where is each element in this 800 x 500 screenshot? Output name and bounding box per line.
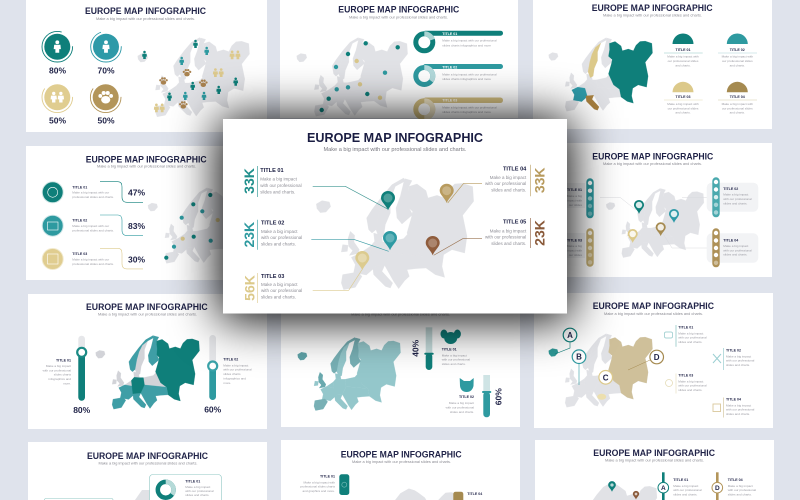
- marker spot: [597, 394, 606, 400]
- item 04: with our professional: [723, 248, 752, 252]
- subtitle: Make a big impact with our professional slides and charts.: [349, 15, 448, 19]
- item A: with our professional: [673, 488, 702, 492]
- item 02: 23K: [241, 222, 257, 248]
- bar 60%: 60%: [204, 404, 222, 414]
- item 04: Make a big impact: [723, 244, 749, 248]
- item 04: TITLE 04: [730, 95, 745, 99]
- item A: A: [661, 485, 666, 492]
- marker C: [599, 370, 612, 384]
- marker C: C: [603, 373, 609, 382]
- row 3: professional slides and charts.: [72, 262, 114, 266]
- item 02: with our professional: [261, 235, 302, 240]
- item 03: Make a big impact: [261, 282, 298, 287]
- heading: EUROPE MAP INFOGRAPHIC: [307, 130, 484, 145]
- item 03: TITLE 03: [678, 374, 693, 378]
- subtitle: Make a big impact with our professional slides and charts.: [603, 14, 702, 18]
- coloured map: [549, 38, 652, 111]
- map fragment: [395, 488, 459, 500]
- item 01: Make a big impact with: [667, 54, 699, 58]
- row 2: [416, 64, 503, 84]
- item 04: TITLE 04: [726, 398, 741, 402]
- item 02: with our professional: [723, 197, 752, 201]
- item 03: Make a big: [567, 244, 582, 248]
- item 04: [718, 82, 757, 115]
- item 01: slides and charts.: [678, 340, 703, 344]
- item 02: Make a big impact: [261, 229, 298, 234]
- text 02: infographics and: [223, 376, 246, 380]
- item 04: [707, 228, 758, 267]
- row 3: 30%: [128, 254, 145, 264]
- stat: 70%: [91, 31, 121, 76]
- row 1: Make a big impact with our: [72, 190, 109, 194]
- row 1: TITLE 01: [72, 185, 87, 189]
- bar 60%: [204, 335, 222, 414]
- item 03: impact with: [567, 248, 582, 252]
- pin 05: [426, 236, 440, 255]
- row 2: 83%: [128, 221, 145, 231]
- drop shadow of centre card: [219, 118, 571, 320]
- item 01: [664, 34, 703, 68]
- item 02: [713, 348, 755, 370]
- item 04: [485, 165, 547, 196]
- row 3: TITLE 03: [442, 99, 457, 103]
- item 01: professional slides charts: [300, 485, 335, 489]
- item 04: slides and charts.: [726, 412, 750, 416]
- item A: [658, 472, 702, 500]
- item 01: [664, 325, 707, 347]
- row 2: TITLE 02: [442, 65, 457, 69]
- item 04: with our professional: [485, 181, 526, 186]
- stat: 80%: [42, 31, 73, 76]
- item 03: our professional slides: [668, 106, 699, 110]
- item 01: and graphics and more.: [302, 489, 335, 493]
- item 04: and charts.: [730, 111, 745, 115]
- item 01: our slides: [569, 203, 582, 207]
- bar 80%: 80%: [73, 405, 91, 415]
- item A: slides and charts.: [673, 492, 698, 496]
- item 03: [664, 82, 703, 115]
- item 01: Make a big: [567, 194, 582, 198]
- subtitle: Make a big impact with our professional slides and charts.: [604, 312, 703, 316]
- item 01: TITLE 01: [260, 168, 284, 174]
- text 02: more.: [223, 381, 231, 385]
- row 3: [416, 98, 503, 118]
- item 05: Make a big impact: [490, 228, 527, 233]
- dot map: [297, 38, 408, 116]
- text 02: [446, 395, 474, 414]
- row 2: professional slides and charts.: [72, 228, 114, 232]
- panel: main centre card: [223, 119, 567, 314]
- subtitle: Make a big impact with our professional slides and charts.: [98, 313, 197, 317]
- heading: EUROPE MAP INFOGRAPHIC: [592, 151, 714, 161]
- item 01: TITLE 01: [676, 48, 690, 52]
- pin 04: [440, 184, 454, 203]
- item 03: slides and charts.: [678, 388, 703, 392]
- item 01: with our professional: [260, 183, 302, 188]
- text 02: Make a big impact: [449, 401, 474, 405]
- subtitle: Make a big impact with our professional slides and charts.: [352, 460, 451, 464]
- text 01: with our professional: [442, 358, 470, 362]
- row 1: professional slides and charts.: [72, 195, 114, 199]
- item A: TITLE 01: [673, 478, 688, 482]
- tube 40%: 40%: [411, 339, 421, 357]
- row 2: slides charts infographics and more: [442, 77, 491, 81]
- text 01: more.: [63, 382, 71, 386]
- icon: cat head: [460, 378, 474, 392]
- item 01: [567, 178, 594, 218]
- panel: highlighted countries: [533, 0, 772, 129]
- item 01: our professional slides: [668, 59, 699, 63]
- panel: round icons with percentages: [26, 146, 267, 280]
- item D: D: [715, 485, 720, 492]
- stat: 50% pair: [42, 82, 73, 126]
- item 01: and charts.: [675, 64, 691, 68]
- marker B: [572, 350, 586, 385]
- item 04: slides and charts.: [491, 188, 526, 192]
- row 2: Make a big impact with our professional: [442, 72, 497, 76]
- row 1: TITLE 01: [442, 32, 457, 36]
- item 01: with our professional: [678, 336, 707, 340]
- subtitle: Make a big impact with our professional slides and charts.: [96, 17, 195, 21]
- panel: bottom left donut boxes: [28, 442, 267, 500]
- item 02: TITLE 02: [726, 349, 741, 353]
- item 03: our slides: [569, 253, 582, 257]
- marker D: [628, 350, 664, 370]
- item 04: our professional slides: [722, 106, 753, 110]
- heading: EUROPE MAP INFOGRAPHIC: [592, 3, 713, 13]
- item 01: TITLE 01: [320, 475, 335, 479]
- text 02: TITLE 02: [223, 358, 238, 362]
- heading: EUROPE MAP INFOGRAPHIC: [86, 154, 207, 164]
- heading: EUROPE MAP INFOGRAPHIC: [341, 450, 462, 460]
- item 02: Make a big impact: [723, 192, 749, 196]
- item 01: 33K: [241, 168, 257, 194]
- item D: slides and charts.: [728, 492, 752, 496]
- text 01: [43, 358, 71, 386]
- heading: EUROPE MAP INFOGRAPHIC: [593, 301, 714, 311]
- dot map: [148, 188, 255, 263]
- map: [298, 337, 401, 410]
- subtitle: Make a big impact with our professional slides and charts.: [603, 162, 702, 166]
- item 02: our professional slides: [722, 59, 753, 63]
- item 02: TITLE 02: [723, 187, 738, 191]
- item 02: Make a big impact with: [722, 54, 753, 58]
- item 01: Make a big impact: [260, 176, 298, 182]
- heading: EUROPE MAP INFOGRAPHIC: [338, 5, 460, 15]
- item 05: 23K: [531, 220, 547, 246]
- item 02: TITLE 02: [730, 48, 745, 52]
- text 02: Make a big impact: [223, 363, 249, 367]
- item 02: with our professional: [726, 359, 755, 363]
- item 02: TITLE 02: [261, 221, 284, 227]
- map fragment: [135, 490, 150, 500]
- item 01: [300, 474, 349, 495]
- subtitle: Make a big impact with our professional slides and charts.: [98, 462, 198, 466]
- text 02: slides and charts.: [450, 410, 474, 414]
- item 03: with our professional: [678, 384, 707, 388]
- pin 02: [383, 231, 397, 250]
- coloured map: [96, 335, 200, 409]
- item 04: slides and charts.: [723, 253, 748, 257]
- item 04: Make a big impact: [726, 403, 751, 407]
- item 03: [241, 273, 302, 303]
- item 02: and charts.: [730, 64, 745, 68]
- box 01: slides and charts.: [185, 493, 210, 497]
- item 03: 56K: [241, 275, 257, 301]
- item 05: slides and charts.: [491, 241, 526, 246]
- item 02: [718, 34, 757, 68]
- item 03: Make a big impact: [678, 380, 704, 384]
- panel: donut rows: [280, 0, 518, 118]
- heading: EUROPE MAP INFOGRAPHIC: [86, 302, 208, 312]
- map: [606, 188, 704, 258]
- subtitle: Make a big impact with our professional slides and charts.: [605, 459, 704, 463]
- item 03: TITLE 03: [261, 274, 284, 280]
- marker D: D: [654, 353, 660, 362]
- row 3: Make a big impact with our: [72, 257, 109, 261]
- row 1: slides charts infographics and more: [442, 44, 491, 48]
- tube 40%: [411, 327, 434, 370]
- text 01: slides charts: [54, 373, 71, 377]
- text 01: slides and charts.: [442, 362, 466, 366]
- text 01: TITLE 01: [442, 348, 457, 352]
- item 02: [707, 177, 758, 217]
- item 04: TITLE 04: [467, 492, 482, 496]
- item 04: [453, 492, 482, 500]
- map fragment: [593, 483, 657, 500]
- row 2: TITLE 02: [72, 219, 87, 223]
- item 04: with our professional: [726, 408, 755, 412]
- text 01: [442, 348, 470, 366]
- text 02: TITLE 02: [459, 395, 474, 399]
- marker A: [555, 328, 577, 354]
- text 01: TITLE 01: [56, 358, 71, 362]
- pin 01: [381, 191, 395, 210]
- text 02: with our professional: [223, 368, 252, 372]
- box 01: Make a big impact: [185, 485, 211, 489]
- item 02: slides and charts.: [723, 202, 748, 206]
- item 03: [567, 228, 594, 267]
- item 01: Make a big impact: [678, 332, 704, 336]
- panel: lettered map: [534, 293, 773, 428]
- box 01: [150, 474, 222, 500]
- pins: [628, 200, 679, 243]
- panel: progress bars with map: [28, 294, 267, 429]
- item 03: Make a big impact with: [667, 102, 699, 106]
- item 01: TITLE 01: [567, 188, 582, 192]
- text 01: infographics and: [48, 377, 71, 381]
- heading: EUROPE MAP INFOGRAPHIC: [593, 448, 715, 458]
- box 01: TITLE 01: [185, 480, 200, 484]
- text 01: with our professional: [43, 368, 71, 372]
- tube 60%: 60%: [493, 388, 503, 405]
- item 01: TITLE 01: [678, 326, 693, 330]
- row 1: Make a big impact with our professional: [442, 39, 497, 43]
- text 01: Make a big impact: [46, 364, 71, 368]
- pins: [608, 481, 639, 500]
- row 2: Make a big impact with our: [72, 224, 109, 228]
- item 01: [241, 166, 302, 197]
- box 01: with our professional: [185, 489, 214, 493]
- panel: test tubes with pet icons: [281, 292, 520, 427]
- item 03: and charts.: [675, 111, 691, 115]
- item 02: Make a big impact: [726, 354, 751, 358]
- text 02: with our professional: [446, 406, 474, 410]
- item A: Make a big impact: [673, 484, 699, 488]
- bar 80%: [73, 336, 91, 415]
- item D: Make a big impact: [728, 484, 753, 488]
- subtitle: Make a big impact with our professional slides and charts.: [97, 164, 196, 168]
- item 04: TITLE 04: [503, 167, 527, 173]
- subtitle: Make a big impact with our professional slides and charts.: [351, 312, 450, 316]
- item D: with our professional: [728, 488, 756, 492]
- panel: dotted pills with map pins: [533, 143, 772, 277]
- panel: bottom middle: [281, 440, 520, 500]
- item 05: with our professional: [485, 234, 526, 240]
- coloured map: [549, 334, 652, 407]
- stat: 80%: 80%: [49, 66, 66, 76]
- item 04: 33K: [531, 167, 547, 193]
- map with icons: [138, 37, 250, 117]
- item 04: TITLE 04: [723, 238, 738, 242]
- marker A: A: [567, 331, 573, 340]
- item D: [712, 472, 756, 500]
- item 04: Make a big impact: [490, 175, 527, 180]
- item D: TITLE 04: [728, 478, 743, 482]
- item 01: impact with: [567, 198, 582, 202]
- icon: dog head: [440, 330, 461, 344]
- item 02: [241, 220, 302, 250]
- row 3: TITLE 03: [72, 252, 87, 256]
- item 05: TITLE 05: [503, 220, 526, 226]
- item 03: slides and charts.: [261, 294, 296, 300]
- item 01: Make a big impact with: [304, 480, 335, 484]
- panel: bottom right: [535, 440, 774, 500]
- item 03: with our professional: [261, 288, 302, 293]
- heading: EUROPE MAP INFOGRAPHIC: [85, 6, 206, 16]
- item 02: slides and charts.: [261, 242, 296, 246]
- stat: 50% paw: [90, 82, 121, 126]
- item 01: slides and charts.: [260, 190, 295, 194]
- pin 03: [355, 251, 369, 270]
- item 03: TITLE 03: [567, 238, 582, 242]
- map of Europe: [316, 178, 474, 290]
- item 04: Make a big impact with: [722, 102, 753, 106]
- item 05: [485, 218, 547, 248]
- item 03: TITLE 03: [676, 95, 690, 99]
- row 3: [42, 248, 145, 270]
- subtitle: Make a big impact with our professional slides and charts.: [324, 147, 466, 153]
- item 04: [713, 398, 755, 418]
- row 3: Make a big impact with our professional: [442, 105, 497, 109]
- marker B: B: [576, 353, 582, 362]
- text 02: [223, 358, 252, 385]
- leader lines: [600, 197, 709, 248]
- box 02: [44, 498, 113, 500]
- stat: 70%: 70%: [97, 66, 115, 76]
- stat: 50% pair: 50%: [49, 116, 66, 126]
- text 02: slides charts: [223, 372, 241, 376]
- heading: EUROPE MAP INFOGRAPHIC: [87, 451, 208, 461]
- item 02: slides and charts.: [726, 363, 750, 367]
- row 3: slides charts infographics and more: [442, 110, 491, 114]
- tube 60%: [482, 375, 503, 417]
- row 1: 47%: [128, 188, 145, 198]
- leader lines: [311, 183, 482, 290]
- row 1: [42, 182, 145, 203]
- row 2: [42, 215, 145, 236]
- panel: person and paw percentages: [26, 0, 267, 132]
- row 1: [416, 31, 503, 51]
- stat: 50% paw: 50%: [97, 116, 115, 126]
- text 01: Make a big impact: [442, 353, 467, 357]
- item 03: [666, 374, 707, 394]
